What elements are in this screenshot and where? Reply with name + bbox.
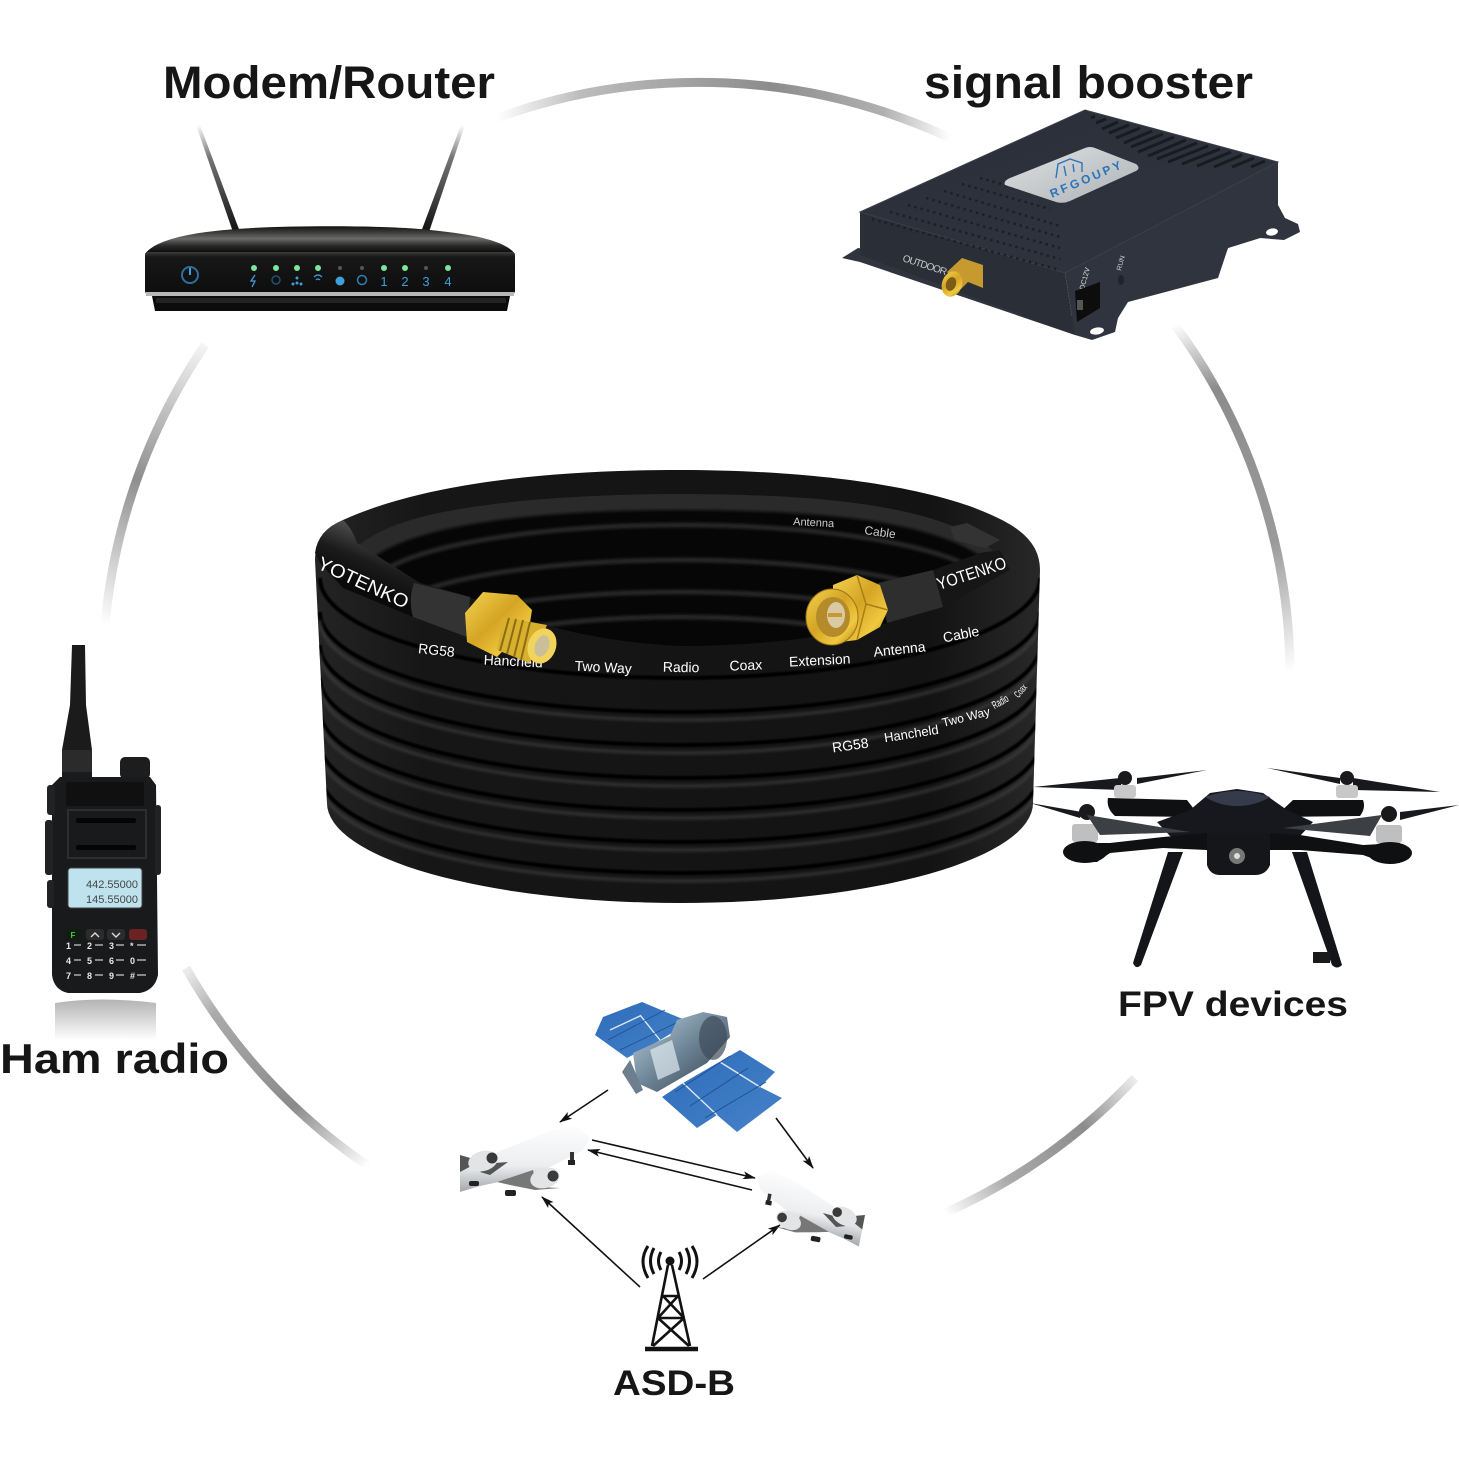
male SMA gold connector: [806, 575, 888, 645]
radio tower: [643, 1246, 698, 1349]
heading: Ham radio: Ham radio: [0, 1035, 229, 1082]
icon: ham radio handset: 6: [109, 956, 114, 966]
icon: ham radio handset: 2: [87, 941, 92, 951]
left cable end: [314, 520, 470, 637]
LCD screen: [68, 868, 142, 908]
front band print: Radio: [663, 659, 700, 675]
icon: ham radio handset: 4: [66, 956, 71, 966]
connection ring arcs: [105, 82, 1290, 1213]
front band print: Extension: [789, 650, 851, 670]
icon: router: 1: [380, 274, 388, 289]
icon: ham radio handset: #: [130, 971, 135, 981]
satellite: [595, 1002, 782, 1132]
icon: ham radio handset: 3: [109, 941, 114, 951]
front band print: Hancheld: [483, 651, 543, 671]
fuselage: [1157, 789, 1313, 850]
rear arms: [1108, 798, 1200, 817]
icon: ham radio handset: 8: [87, 971, 92, 981]
mounting flanges: [842, 205, 1300, 340]
left airplane: [460, 1126, 590, 1196]
icon: ham radio handset: *: [130, 941, 134, 951]
icon: signal booster box: OUTDOOR: [901, 253, 948, 278]
icon: router: 3: [422, 274, 430, 289]
icon: ham radio handset: F: [71, 931, 76, 940]
front arms: [1075, 833, 1207, 862]
front band print: RG58: [831, 735, 870, 756]
inner hole with back turns: [360, 494, 993, 646]
icon: ham radio handset: 1: [66, 941, 71, 951]
coaxial cable coil: [314, 470, 1040, 903]
right cable end: YOTENKO: [934, 553, 1009, 594]
rear cable print: [793, 516, 897, 541]
front band print: Radio: [990, 693, 1011, 712]
front band print: Two Way: [941, 704, 991, 730]
front band print: RG58: [417, 640, 456, 660]
right airplane: [747, 1169, 870, 1250]
diagram: ADS-B system: [460, 1002, 870, 1349]
LCD screen: 145.55000: [86, 894, 138, 906]
front band print: Cable: [942, 623, 981, 645]
front band print: Coax: [729, 656, 762, 674]
left cable end: YOTENKO: [314, 553, 412, 613]
heading: signal booster: signal booster: [924, 57, 1253, 108]
icon: ham radio handset: 5: [87, 956, 92, 966]
rear cable print: Antenna: [793, 516, 835, 530]
icon: ham radio handset: 9: [109, 971, 114, 981]
right cable end: [878, 523, 1010, 623]
vents: [1091, 116, 1265, 167]
motors: [1072, 771, 1402, 843]
icon: ham radio handset: [45, 645, 161, 1040]
icon: ham radio handset: 0: [130, 956, 135, 966]
heading: FPV devices: FPV devices: [1118, 985, 1348, 1024]
heading: ASD-B: ASD-B: [613, 1364, 735, 1403]
heading: Modem/Router: Modem/Router: [163, 57, 495, 108]
female SMA gold connector: [465, 592, 561, 668]
icon: router: 2: [401, 274, 409, 289]
landing legs: [1133, 852, 1183, 967]
icon: signal booster box: DC12V: [1079, 267, 1092, 291]
rear cable print: Cable: [864, 523, 897, 541]
sticker label: RFGOUPY: [1048, 158, 1123, 201]
icon: ham radio handset: 7: [66, 971, 71, 981]
LCD screen: 442.55000: [86, 879, 138, 891]
coil silhouette: [315, 470, 1040, 903]
icon: drone: [1030, 768, 1459, 968]
icon: router: 4: [444, 274, 452, 289]
coil turn separators and highlights: [320, 578, 1040, 881]
icon: router: [145, 125, 515, 311]
icon: signal booster box: [842, 110, 1300, 340]
front band print: [417, 623, 1030, 756]
front band print: Antenna: [873, 638, 926, 660]
arrows: [542, 1090, 813, 1287]
front band print: Two Way: [574, 658, 632, 676]
camera housing: [1207, 833, 1270, 875]
front blades: [1087, 815, 1190, 835]
front band print: Coax: [1012, 682, 1030, 700]
sticker label: [1005, 147, 1138, 203]
propellers: [1030, 768, 1459, 820]
reflection: [55, 1000, 156, 1040]
front band print: Hancheld: [883, 722, 940, 745]
SMA port: [938, 258, 983, 300]
icon: signal booster box: RUN: [1116, 255, 1127, 272]
